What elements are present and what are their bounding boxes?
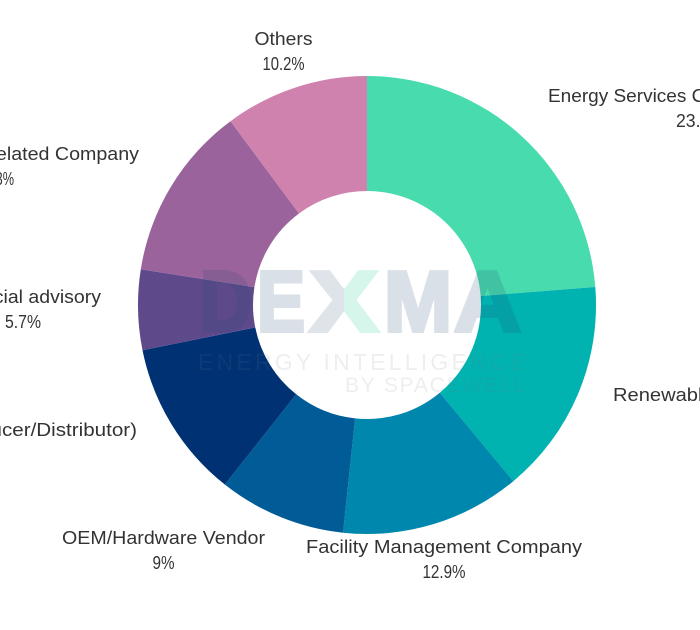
watermark logo [200,270,524,392]
label: OEM/Hardware Vendor [62,528,265,573]
label: Energy Services Company [548,86,700,131]
label: Facility Management Company: Facility Management Company [306,537,582,557]
slice: Related Company [141,121,299,287]
logo wordmark DEXMA [203,270,522,333]
logo wordmark DEXMA: D [200,255,252,350]
label: Facility Management Company [306,537,582,582]
label: Others: 10.2% [262,54,304,74]
slice: Others [230,76,367,214]
slice: Financial advisory [138,269,255,350]
logo wordmark DEXMA: M [384,255,452,350]
label: Related Company [0,144,139,189]
label: OEM/Hardware Vendor: 9% [152,553,174,573]
logo tagline: ENERGY INTELLIGENCE [198,349,525,375]
donut chart [138,76,596,534]
logo wordmark DEXMA: X [310,255,378,350]
logo wordmark DEXMA: E [257,255,305,350]
slice: Facility Management Company [343,393,513,534]
slice: Producer/Distributor [142,328,296,484]
logo wordmark DEXMA: X [310,255,378,350]
label: Others: Others [254,29,312,49]
slice: Renewable [440,287,596,481]
label: Financial advisory [0,287,101,332]
slice: OEM/Hardware Vendor [225,394,355,533]
slice: Energy Services Company [367,76,595,296]
label: Facility Management Company: 12.9% [422,562,466,582]
label: OEM/Hardware Vendor: OEM/Hardware Vendor [62,528,265,548]
label: Financial advisory: 5.7% [5,312,41,332]
label: Others [254,29,312,74]
logo byline: BY SPACEWELL [345,374,525,397]
logo wordmark DEXMA: A [454,255,521,350]
